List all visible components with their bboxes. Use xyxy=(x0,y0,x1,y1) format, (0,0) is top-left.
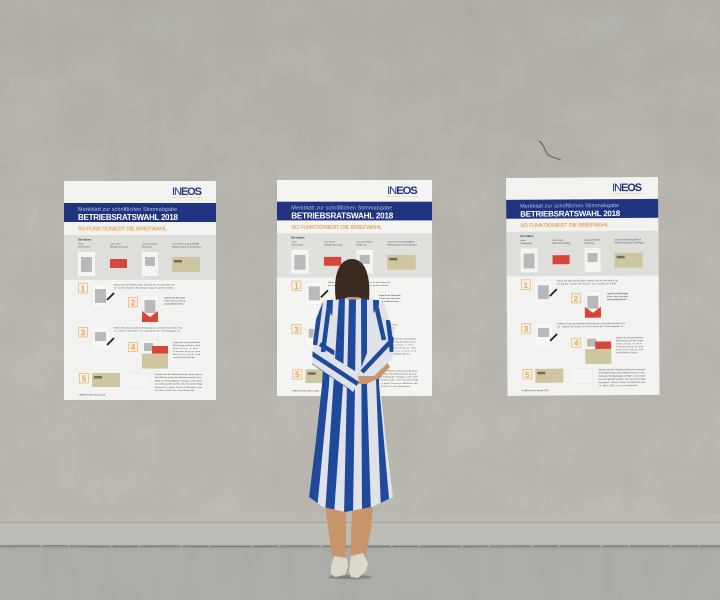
materials band: einen Freiumschlag DIN A5 xyxy=(387,241,415,244)
materials band: DIN-A6-Umschlag xyxy=(324,244,343,247)
poster 3 xyxy=(506,177,660,396)
materials band: einen roten xyxy=(552,239,564,242)
striped dress xyxy=(309,298,393,512)
step 5: den Wahlvorstand. Ihre Stimme muss bis zum xyxy=(598,371,645,375)
materials band: einen xyxy=(291,242,298,244)
wall crack xyxy=(539,141,561,160)
hair xyxy=(335,259,369,300)
step 2: und verschließen Sie ihn. xyxy=(607,298,627,301)
step 2: in den roten Umschlag xyxy=(379,297,401,300)
step 1: ihn einmal. Achten Sie darauf, dass er geheim bleibt. xyxy=(328,284,390,287)
materials band: DIN-A6-Umschlag xyxy=(552,242,571,245)
step 4: Wahlvorstand und xyxy=(616,348,644,351)
poster 1 xyxy=(64,181,216,400)
step 3: Füllen Sie die persönliche Erklärung aus und unterschreiben Sie xyxy=(114,326,183,330)
footer note: © INEOS in Köln, Februar 2018 xyxy=(291,390,320,392)
step 5: 5 xyxy=(82,374,87,384)
step 3: Füllen Sie die persönliche Erklärung aus und unterschreiben Sie xyxy=(328,323,398,326)
step 4: Erklärung und den roten xyxy=(388,341,417,344)
person viewed from behind xyxy=(309,259,394,580)
materials band: Stimmzettel xyxy=(291,244,303,247)
materials band: einen Freiumschlag DIN A5 xyxy=(172,242,199,246)
step 4 xyxy=(572,335,644,364)
materials band: Stimmzettel xyxy=(78,246,90,248)
step 4: Freiumschlag an den xyxy=(616,345,644,348)
step 3 xyxy=(78,326,183,350)
step 5: 14. März 2018, bis zum Wahlende. xyxy=(155,389,195,392)
materials band: Die haben: xyxy=(291,236,305,240)
shoes xyxy=(331,553,368,578)
step 5: den Wahlvorstand. Ihre Stimme muss bis zum xyxy=(370,372,417,375)
step 5: kostenfrei. Letzter Termin ist Mittwoch, der xyxy=(370,382,418,385)
materials band: DIN-A6-Umschlag xyxy=(110,246,128,248)
header band: BETRIEBSRATSWAHL 2018 xyxy=(291,212,394,220)
step 2: 2 xyxy=(345,296,350,305)
materials band: einen roten xyxy=(324,241,336,244)
step 4: verschließen Sie ihn. xyxy=(388,353,411,356)
step 5 xyxy=(293,369,419,388)
step 5: Senden Sie den Wahlumschlag rechtzeitig an xyxy=(598,368,646,371)
right sleeve xyxy=(358,305,394,376)
materials band: Erklärung xyxy=(142,246,152,248)
logo: INEOS xyxy=(172,186,202,198)
step 4: Umschlag in den xyxy=(173,348,199,350)
step 1: ihn einmal. Achten Sie darauf, dass er geheim bleibt. xyxy=(114,286,174,290)
step 4: Freiumschlag an den xyxy=(388,347,417,350)
header band: Merkblatt zur schriftlichen Stimmabgabe xyxy=(291,206,392,212)
materials band: Die haben: xyxy=(520,234,534,238)
footer note: © INEOS in Köln, Februar 2018 xyxy=(521,389,549,392)
materials band xyxy=(506,231,659,277)
step 3 xyxy=(522,322,626,346)
background: concrete step and pavement xyxy=(0,514,720,600)
materials band xyxy=(64,235,216,280)
step 1 xyxy=(521,279,619,303)
step 2: Legen Sie den Stimmzettel xyxy=(607,292,628,295)
step 4: 4 xyxy=(131,343,136,352)
header band xyxy=(277,202,432,220)
step 4: Umschlag in den xyxy=(388,345,415,347)
step 1: 1 xyxy=(524,281,529,290)
step 3: 3 xyxy=(294,325,299,334)
materials band: eine persönliche xyxy=(142,242,159,246)
logo: INEOS xyxy=(612,182,642,194)
step 2: Legen Sie den Stimmzettel xyxy=(379,294,401,297)
step 5: kostenfrei. Letzter Termin ist Mittwoch, der xyxy=(155,386,202,389)
step 4: Erklärung und den roten xyxy=(616,339,644,342)
section heading: SO FUNKTIONIERT DIE BRIEFWAHL xyxy=(78,226,168,232)
step 5 xyxy=(80,373,203,392)
step 5: sie nicht gezählt werden. Der Versand erfolgt xyxy=(155,383,202,386)
materials band: einen Freiumschlag DIN A5 xyxy=(614,238,642,241)
step 1: Falten Sie den Stimmzettel, kreuzen Sie an und falten Sie xyxy=(328,281,391,284)
poster 2 xyxy=(277,180,432,396)
step 1: 1 xyxy=(294,282,299,291)
step 4: Legen Sie die persönliche xyxy=(388,338,417,341)
step 2: 2 xyxy=(574,294,579,303)
step 2: und verschließen Sie ihn. xyxy=(164,302,184,306)
materials band: Erklärung xyxy=(584,242,595,245)
materials band: Stimmzettel xyxy=(520,242,532,245)
materials band: Die haben: xyxy=(78,238,92,242)
step 4: 4 xyxy=(574,339,579,348)
step 5: den Wahlvorstand. Ihre Stimme muss bis zum xyxy=(155,376,201,379)
step 2: Legen Sie den Stimmzettel xyxy=(164,296,186,300)
step 3: 3 xyxy=(81,328,86,338)
step 3 xyxy=(292,323,398,347)
step 5: kostenfrei. Letzter Termin ist Mittwoch, der xyxy=(598,381,646,384)
step 4: Legen Sie die persönliche xyxy=(173,341,201,344)
step 2 xyxy=(571,292,629,318)
materials band: (Wahlvorstand als Empfänger) xyxy=(387,244,417,247)
step 2: in den roten Umschlag xyxy=(164,300,186,302)
step 5 xyxy=(523,368,646,388)
step 1 xyxy=(78,284,176,307)
step 5: 14. März 2018, bis zum Wahlende. xyxy=(370,385,411,388)
materials band: (Wahlvorstand als Empfänger) xyxy=(614,241,644,244)
logo: Betriebsrat Deutschland xyxy=(172,196,202,199)
materials band: einen xyxy=(78,244,84,246)
step 5: 5 xyxy=(295,371,300,380)
header band: BETRIEBSRATSWAHL 2018 xyxy=(78,213,179,222)
step 2 xyxy=(343,293,401,319)
step 3: 3 xyxy=(524,325,529,334)
step 5: 5 xyxy=(525,370,530,379)
step 4: Umschlag in den xyxy=(616,343,642,345)
materials band: einen xyxy=(520,240,527,242)
materials band: eine persönliche xyxy=(584,239,601,242)
hand xyxy=(358,362,390,384)
header band: Merkblatt zur schriftlichen Stimmabgabe xyxy=(520,203,619,210)
header band: BETRIEBSRATSWAHL 2018 xyxy=(520,209,621,219)
header band xyxy=(64,203,216,222)
neck xyxy=(347,297,359,300)
step 4: Freiumschlag an den xyxy=(173,350,201,353)
step 5: Ende der Stimmabgabe vorliegen, sonst kann xyxy=(598,374,646,378)
materials band: einen roten xyxy=(110,242,122,246)
step 2: und verschließen Sie ihn. xyxy=(379,300,400,303)
step 5: 14. März 2018, bis zum Wahlende. xyxy=(598,384,639,387)
step 4: Erklärung und den roten xyxy=(173,344,201,347)
footer note: © INEOS in Köln, Februar 2018 xyxy=(78,394,106,396)
step 4: verschließen Sie ihn. xyxy=(173,356,195,359)
step 2 xyxy=(128,296,186,322)
step 1: Falten Sie den Stimmzettel, kreuzen Sie an und falten Sie xyxy=(114,284,176,286)
step 5: Ende der Stimmabgabe vorliegen, sonst kann xyxy=(370,376,419,379)
step 4: Wahlvorstand und xyxy=(388,350,417,353)
section heading: SO FUNKTIONIERT DIE BRIEFWAHL xyxy=(291,225,383,231)
step 1: 1 xyxy=(81,284,86,294)
step 1 xyxy=(292,281,391,304)
step 4 xyxy=(128,340,201,368)
step 5: sie nicht gezählt werden. Der Versand erfolgt xyxy=(598,378,646,381)
step 5: Senden Sie den Wahlumschlag rechtzeitig an xyxy=(155,373,203,376)
step 4: verschließen Sie ihn. xyxy=(616,351,639,354)
materials band: Erklärung xyxy=(357,244,367,247)
step 4 xyxy=(343,337,417,365)
section heading: SO FUNKTIONIERT DIE BRIEFWAHL xyxy=(520,223,610,229)
materials band xyxy=(277,233,432,278)
logo: INEOS xyxy=(387,185,418,197)
logo: Betriebsrat Deutschland xyxy=(387,195,418,198)
step 4: Legen Sie die persönliche xyxy=(616,336,644,339)
shadow at feet xyxy=(328,575,372,579)
legs xyxy=(325,505,373,560)
step 3: Füllen Sie die persönliche Erklärung aus und unterschreiben Sie xyxy=(557,322,626,325)
step 3: sie. Geben Sie dabei Ort und Datum der Stimmabgabe an. xyxy=(114,330,181,332)
materials band: eine persönliche xyxy=(357,241,374,244)
step 4: 4 xyxy=(345,340,350,349)
header band: Merkblatt zur schriftlichen Stimmabgabe xyxy=(78,207,177,213)
step 1: Falten Sie den Stimmzettel, kreuzen Sie an und falten Sie xyxy=(557,279,619,283)
logo: Betriebsrat Deutschland xyxy=(612,192,642,195)
step 4: Wahlvorstand und xyxy=(173,353,201,356)
step 5: sie nicht gezählt werden. Der Versand erfolgt xyxy=(370,379,418,382)
step 3: sie. Geben Sie dabei Ort und Datum der Stimmabgabe an. xyxy=(557,325,624,328)
step 5: Senden Sie den Wahlumschlag rechtzeitig an xyxy=(370,369,419,372)
step 2: in den roten Umschlag xyxy=(607,295,629,298)
step 2: 2 xyxy=(131,298,136,308)
step 5: Ende der Stimmabgabe vorliegen, sonst kann xyxy=(155,379,203,382)
step 1: ihn einmal. Achten Sie darauf, dass er geheim bleibt. xyxy=(557,282,617,286)
left sleeve xyxy=(312,302,359,392)
step 3: sie. Geben Sie dabei Ort und Datum der Stimmabgabe an. xyxy=(328,326,397,329)
header band xyxy=(506,199,658,219)
materials band: (Wahlvorstand als Empfänger) xyxy=(172,246,202,248)
